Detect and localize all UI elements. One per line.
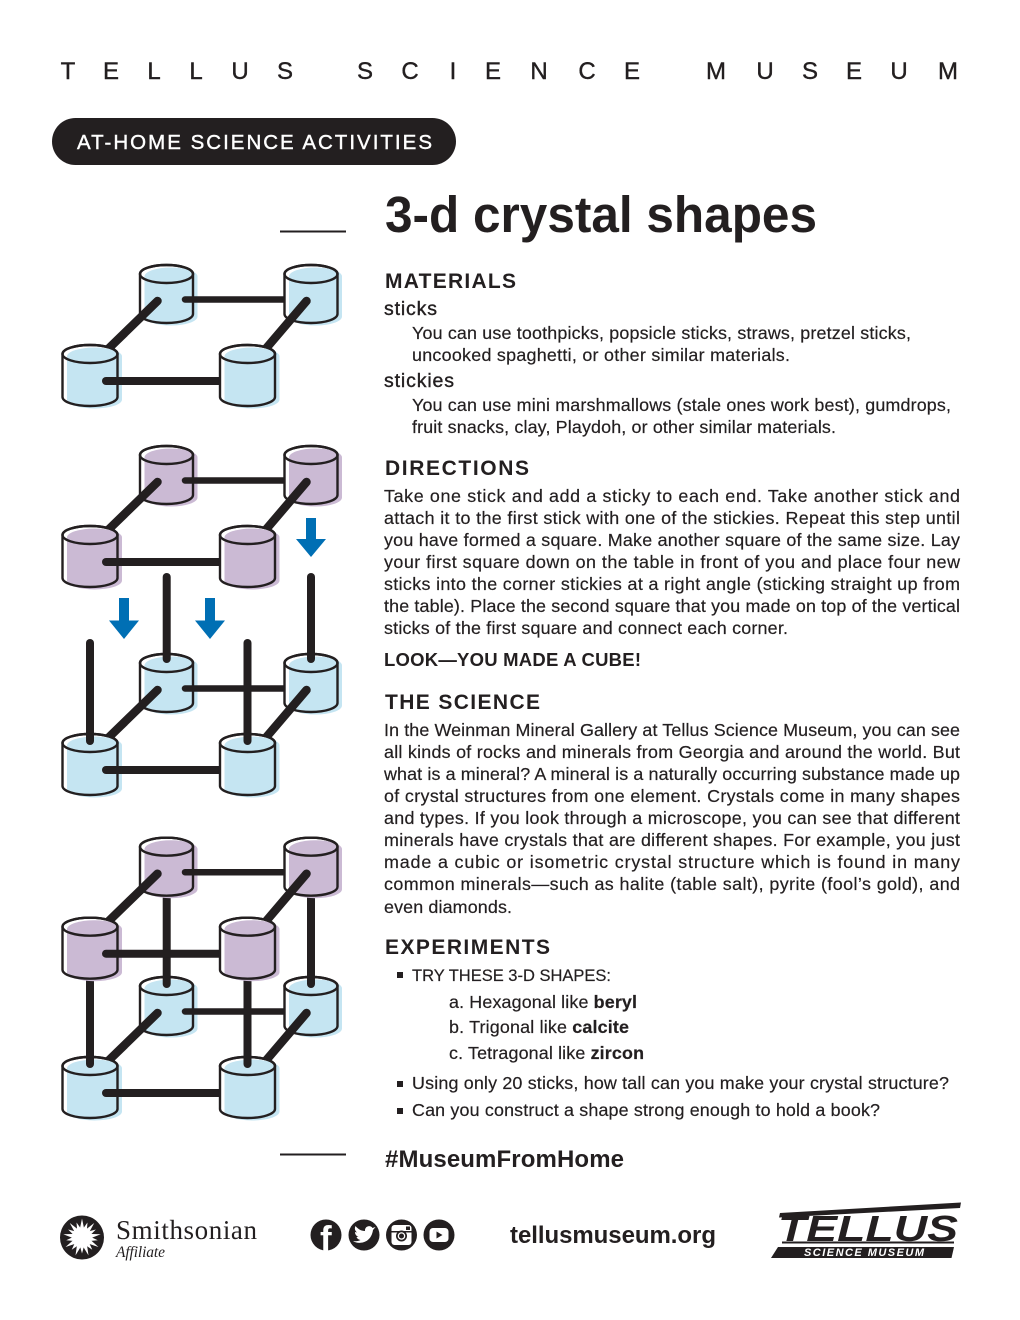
section: the science: THE SCIENCE: [385, 691, 540, 714]
section: the science: minerals have crystals that are different shapes. For example, you just: [384, 830, 960, 850]
section: the science: common minerals—such as halite (table salt), pyrite (fool’s gold), and: [384, 874, 960, 894]
logo: Tellus Science Museum: SCIENCE MUSEUM: [804, 1247, 925, 1259]
icon: youtube: [424, 1220, 454, 1250]
museum name header: TELLUS: [61, 58, 293, 85]
section: directions: sticks of the first square and connect each corner.: [384, 618, 788, 638]
logo: Smithsonian Affiliate: Affiliate: [115, 1244, 165, 1261]
hashtag: #MuseumFromHome: [385, 1146, 624, 1173]
illustration: cube building steps: [62, 265, 342, 1120]
section: materials: stickies: [384, 370, 454, 392]
section: materials: sticks: [384, 298, 437, 320]
section: materials: MATERIALS: [385, 270, 516, 293]
social media icons: [310, 1220, 454, 1258]
section: materials: You can use mini marshmallows (stale ones work best), gumdrops,: [412, 395, 951, 415]
section: directions: LOOK—YOU MADE A CUBE!: [384, 649, 641, 670]
section: directions: [384, 457, 960, 670]
step 1: first square with blue stickies: [62, 265, 342, 408]
section: experiments: c. Tetragonal like zircon: [449, 1043, 644, 1063]
section: experiments: TRY THESE 3-D SHAPES:: [412, 967, 611, 985]
section: the science: of crystal structures from one element. Crystals come in many shapes: [384, 786, 960, 806]
section: the science: all kinds of rocks and minerals from Georgia and around the world. But: [384, 742, 960, 762]
section: directions: attach it to the first stick with one of the stickies. Repeat this step until: [384, 508, 960, 528]
logo: Tellus Science Museum: [771, 1202, 961, 1259]
section: experiments: Can you construct a shape strong enough to hold a book?: [412, 1100, 880, 1120]
section: the science: [383, 691, 960, 917]
section: materials: You can use toothpicks, popsicle sticks, straws, pretzel sticks,: [412, 323, 911, 343]
website address: tellusmuseum.org: [510, 1222, 716, 1249]
section: directions: the table). Place the second square that you made on top of the vertical: [384, 596, 960, 616]
section: experiments: EXPERIMENTS: [385, 936, 550, 959]
section: directions: sticks into the corner stickies at a right angle (sticking straight up from: [384, 574, 960, 594]
icon: facebook: f: [320, 1220, 332, 1258]
logo: Smithsonian Affiliate: [60, 1215, 258, 1261]
icon: facebook: [310, 1220, 342, 1258]
banner: at-home science activities: AT-HOME SCIENCE ACTIVITIES: [77, 131, 432, 154]
museum name header: [61, 58, 958, 85]
section: experiments: Using only 20 sticks, how tall can you make your crystal structure?: [412, 1073, 949, 1093]
banner: at-home science activities: [52, 118, 456, 165]
logo: Smithsonian Affiliate: Smithsonian: [116, 1215, 258, 1245]
step 4: finished cube: [62, 838, 342, 1120]
icon: instagram: [386, 1220, 417, 1250]
section: materials: uncooked spaghetti, or other similar materials.: [412, 345, 790, 365]
section: the science: In the Weinman Mineral Gallery at Tellus Science Museum, you can see: [384, 720, 960, 740]
section: directions: DIRECTIONS: [385, 457, 529, 480]
rule above hashtag: [280, 1154, 346, 1156]
logo: Tellus Science Museum: TELLUS: [778, 1208, 958, 1249]
section: materials: [384, 270, 951, 437]
section: the science: made a cubic or isometric crystal structure which is found in many: [384, 852, 960, 872]
section: directions: your first square down on the table in front of you and place four new: [384, 552, 960, 572]
section: experiments: [385, 936, 949, 1120]
section: directions: you have formed a square. Make another square of the same size. Lay: [384, 530, 960, 550]
museum name header: MUSEUM: [706, 58, 958, 85]
section: the science: and types. If you look through a microscope, you can see that different: [384, 808, 960, 828]
museum name header: SCIENCE: [357, 58, 640, 85]
section: experiments: a. Hexagonal like beryl: [449, 992, 637, 1012]
section: materials: fruit snacks, clay, Playdoh, or other similar materials.: [412, 417, 836, 437]
rule above illustration: [280, 230, 346, 232]
step 3: first square with vertical sticks and arrows: [62, 518, 342, 797]
title: 3-d crystal shapes: [385, 186, 817, 243]
step 2: second square with purple stickies: [62, 446, 342, 589]
section: the science: even diamonds.: [384, 897, 512, 917]
icon: twitter: [348, 1220, 380, 1250]
section: the science: what is a mineral? A mineral is a naturally occurring substance made up: [383, 764, 960, 784]
section: directions: Take one stick and add a sticky to each end. Take another stick and: [384, 486, 960, 506]
section: experiments: b. Trigonal like calcite: [449, 1017, 629, 1037]
